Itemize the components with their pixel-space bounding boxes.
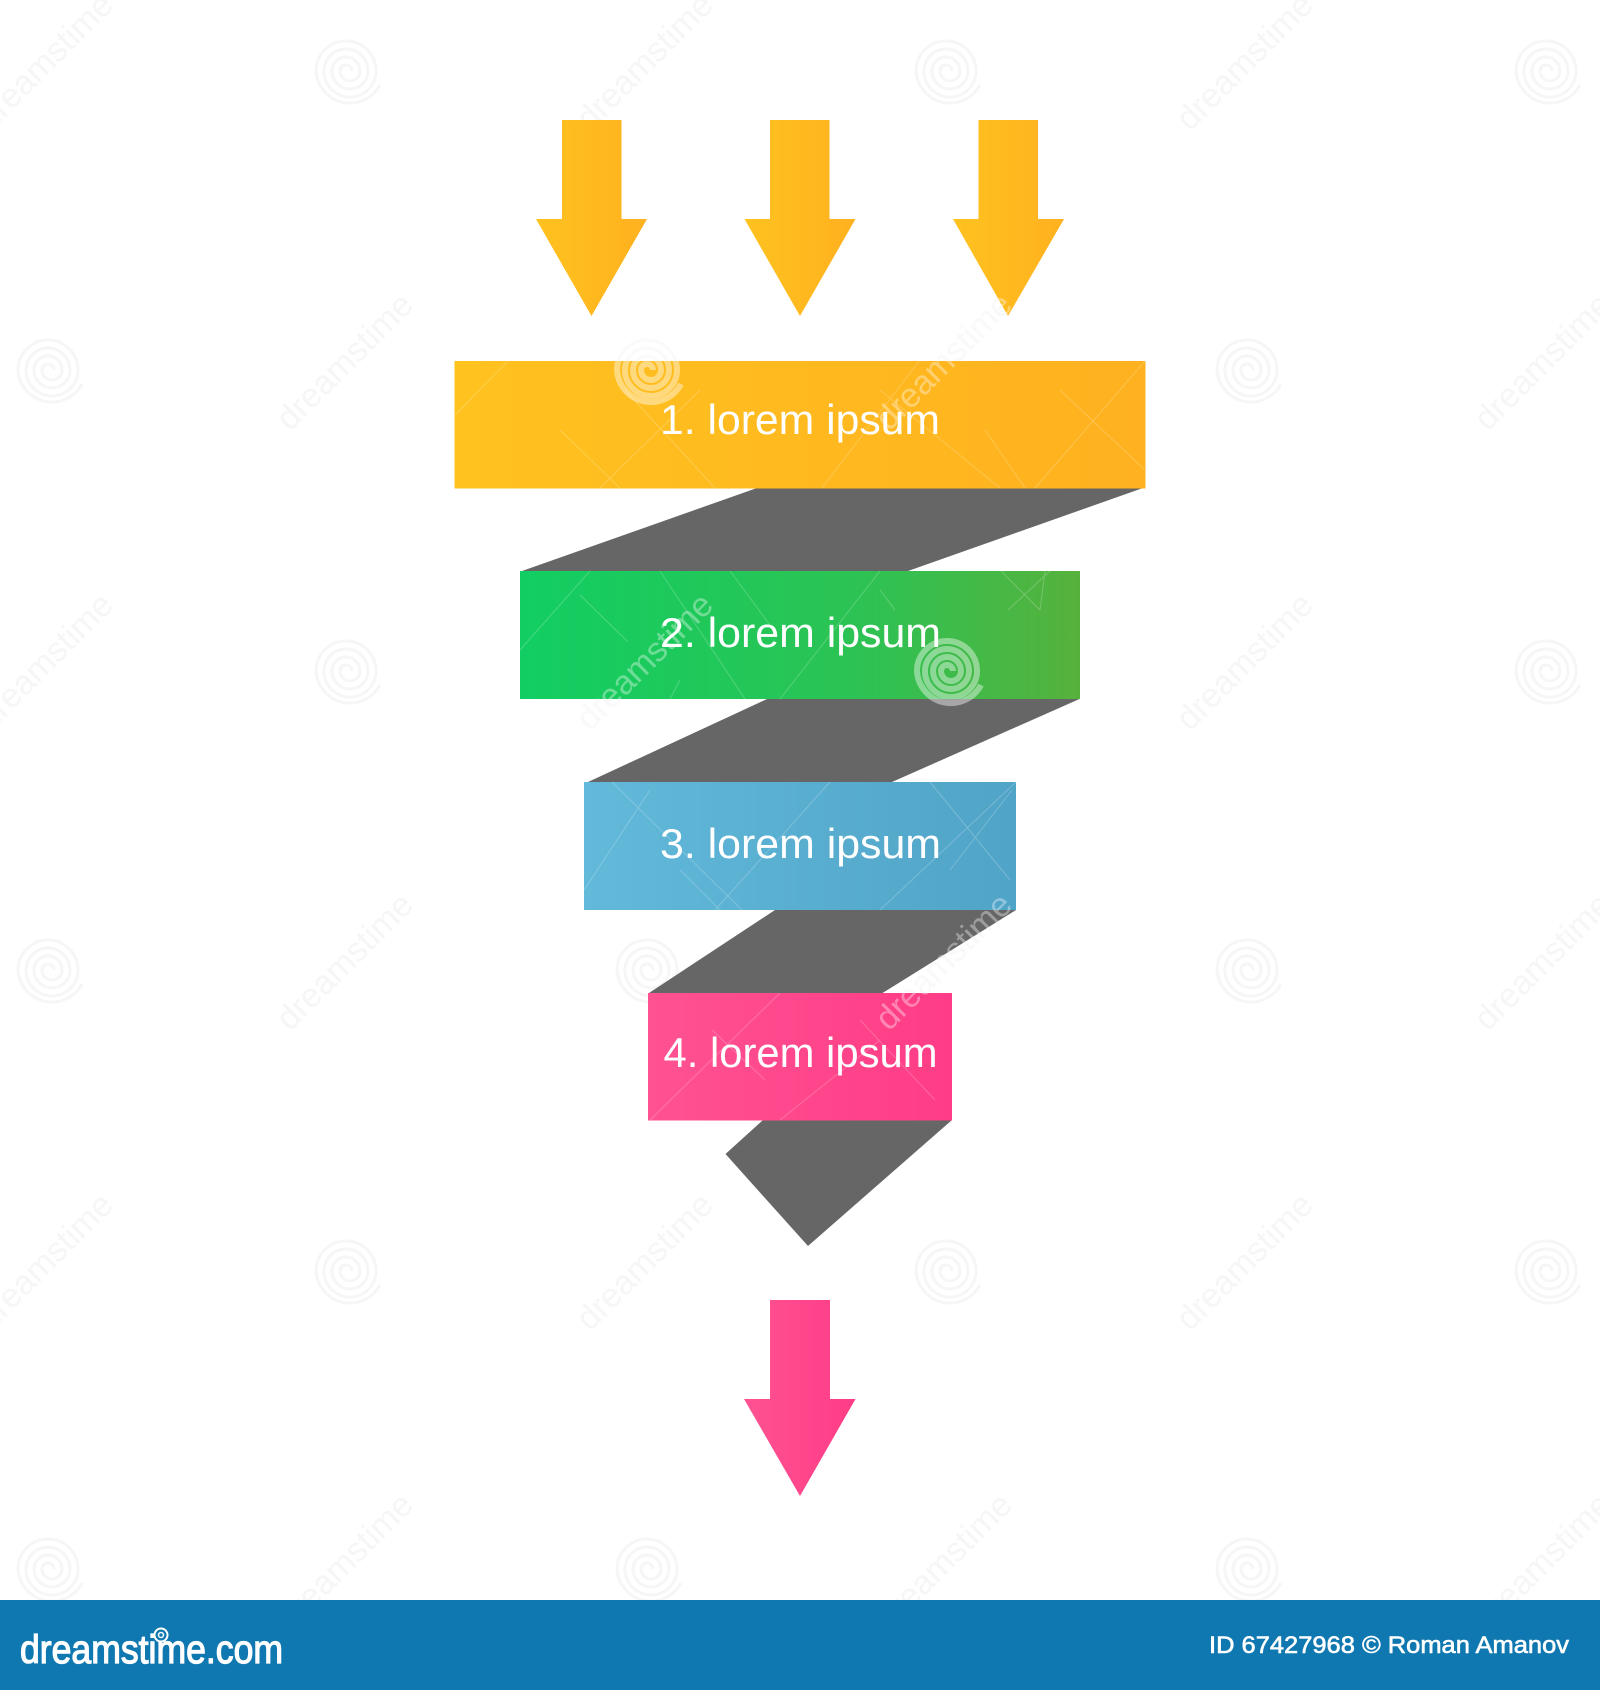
stage 4 bar: dreamstime [868, 886, 1020, 1038]
infographic canvas: dreamstime [868, 886, 1020, 1038]
stage 1 bar: dreamstime [868, 286, 1020, 438]
stage 4 bar [648, 886, 1020, 1120]
input arrows [536, 120, 1064, 316]
footer logo: dreamstime.com [20, 1628, 283, 1672]
stage 2 bar [520, 570, 1080, 738]
ribbon fold 1 [522, 488, 1143, 571]
arrow: input 2 [744, 120, 856, 316]
stage 2 bar: 2. lorem ipsum [660, 609, 941, 656]
footer bar [0, 1600, 1600, 1690]
infographic canvas: dreamstime [569, 1186, 721, 1338]
arrow: output [744, 1300, 856, 1496]
arrow: input 3 [953, 120, 1064, 316]
infographic canvas: dreamstime [269, 886, 421, 1038]
infographic canvas: dreamstime [868, 1486, 1020, 1638]
funnel ribbon [454, 286, 1146, 1246]
stage 1 bar [454, 286, 1146, 488]
stage 2 bar: dreamstime [569, 586, 721, 738]
arrow: input 1 [536, 120, 647, 316]
stage 3 bar: 3. lorem ipsum [660, 820, 941, 867]
infographic canvas: dreamstime [1169, 586, 1321, 738]
infographic canvas: dreamstime [269, 1486, 421, 1638]
infographic canvas: dreamstime [569, 586, 721, 738]
stage 1 bar: 1. lorem ipsum [660, 396, 940, 443]
footer credit: ID 67427968 © Roman Amanov [1209, 1632, 1569, 1659]
infographic canvas: dreamstime [868, 286, 1020, 438]
infographic canvas: dreamstime [1169, 1186, 1321, 1338]
ribbon tail [726, 1120, 952, 1246]
infographic canvas: dreamstime [269, 286, 421, 438]
stage 3 bar [584, 782, 1016, 910]
stage 4 bar: 4. lorem ipsum [664, 1029, 938, 1076]
ribbon fold 2 [588, 699, 1080, 782]
ribbon fold 3 [649, 910, 1016, 993]
